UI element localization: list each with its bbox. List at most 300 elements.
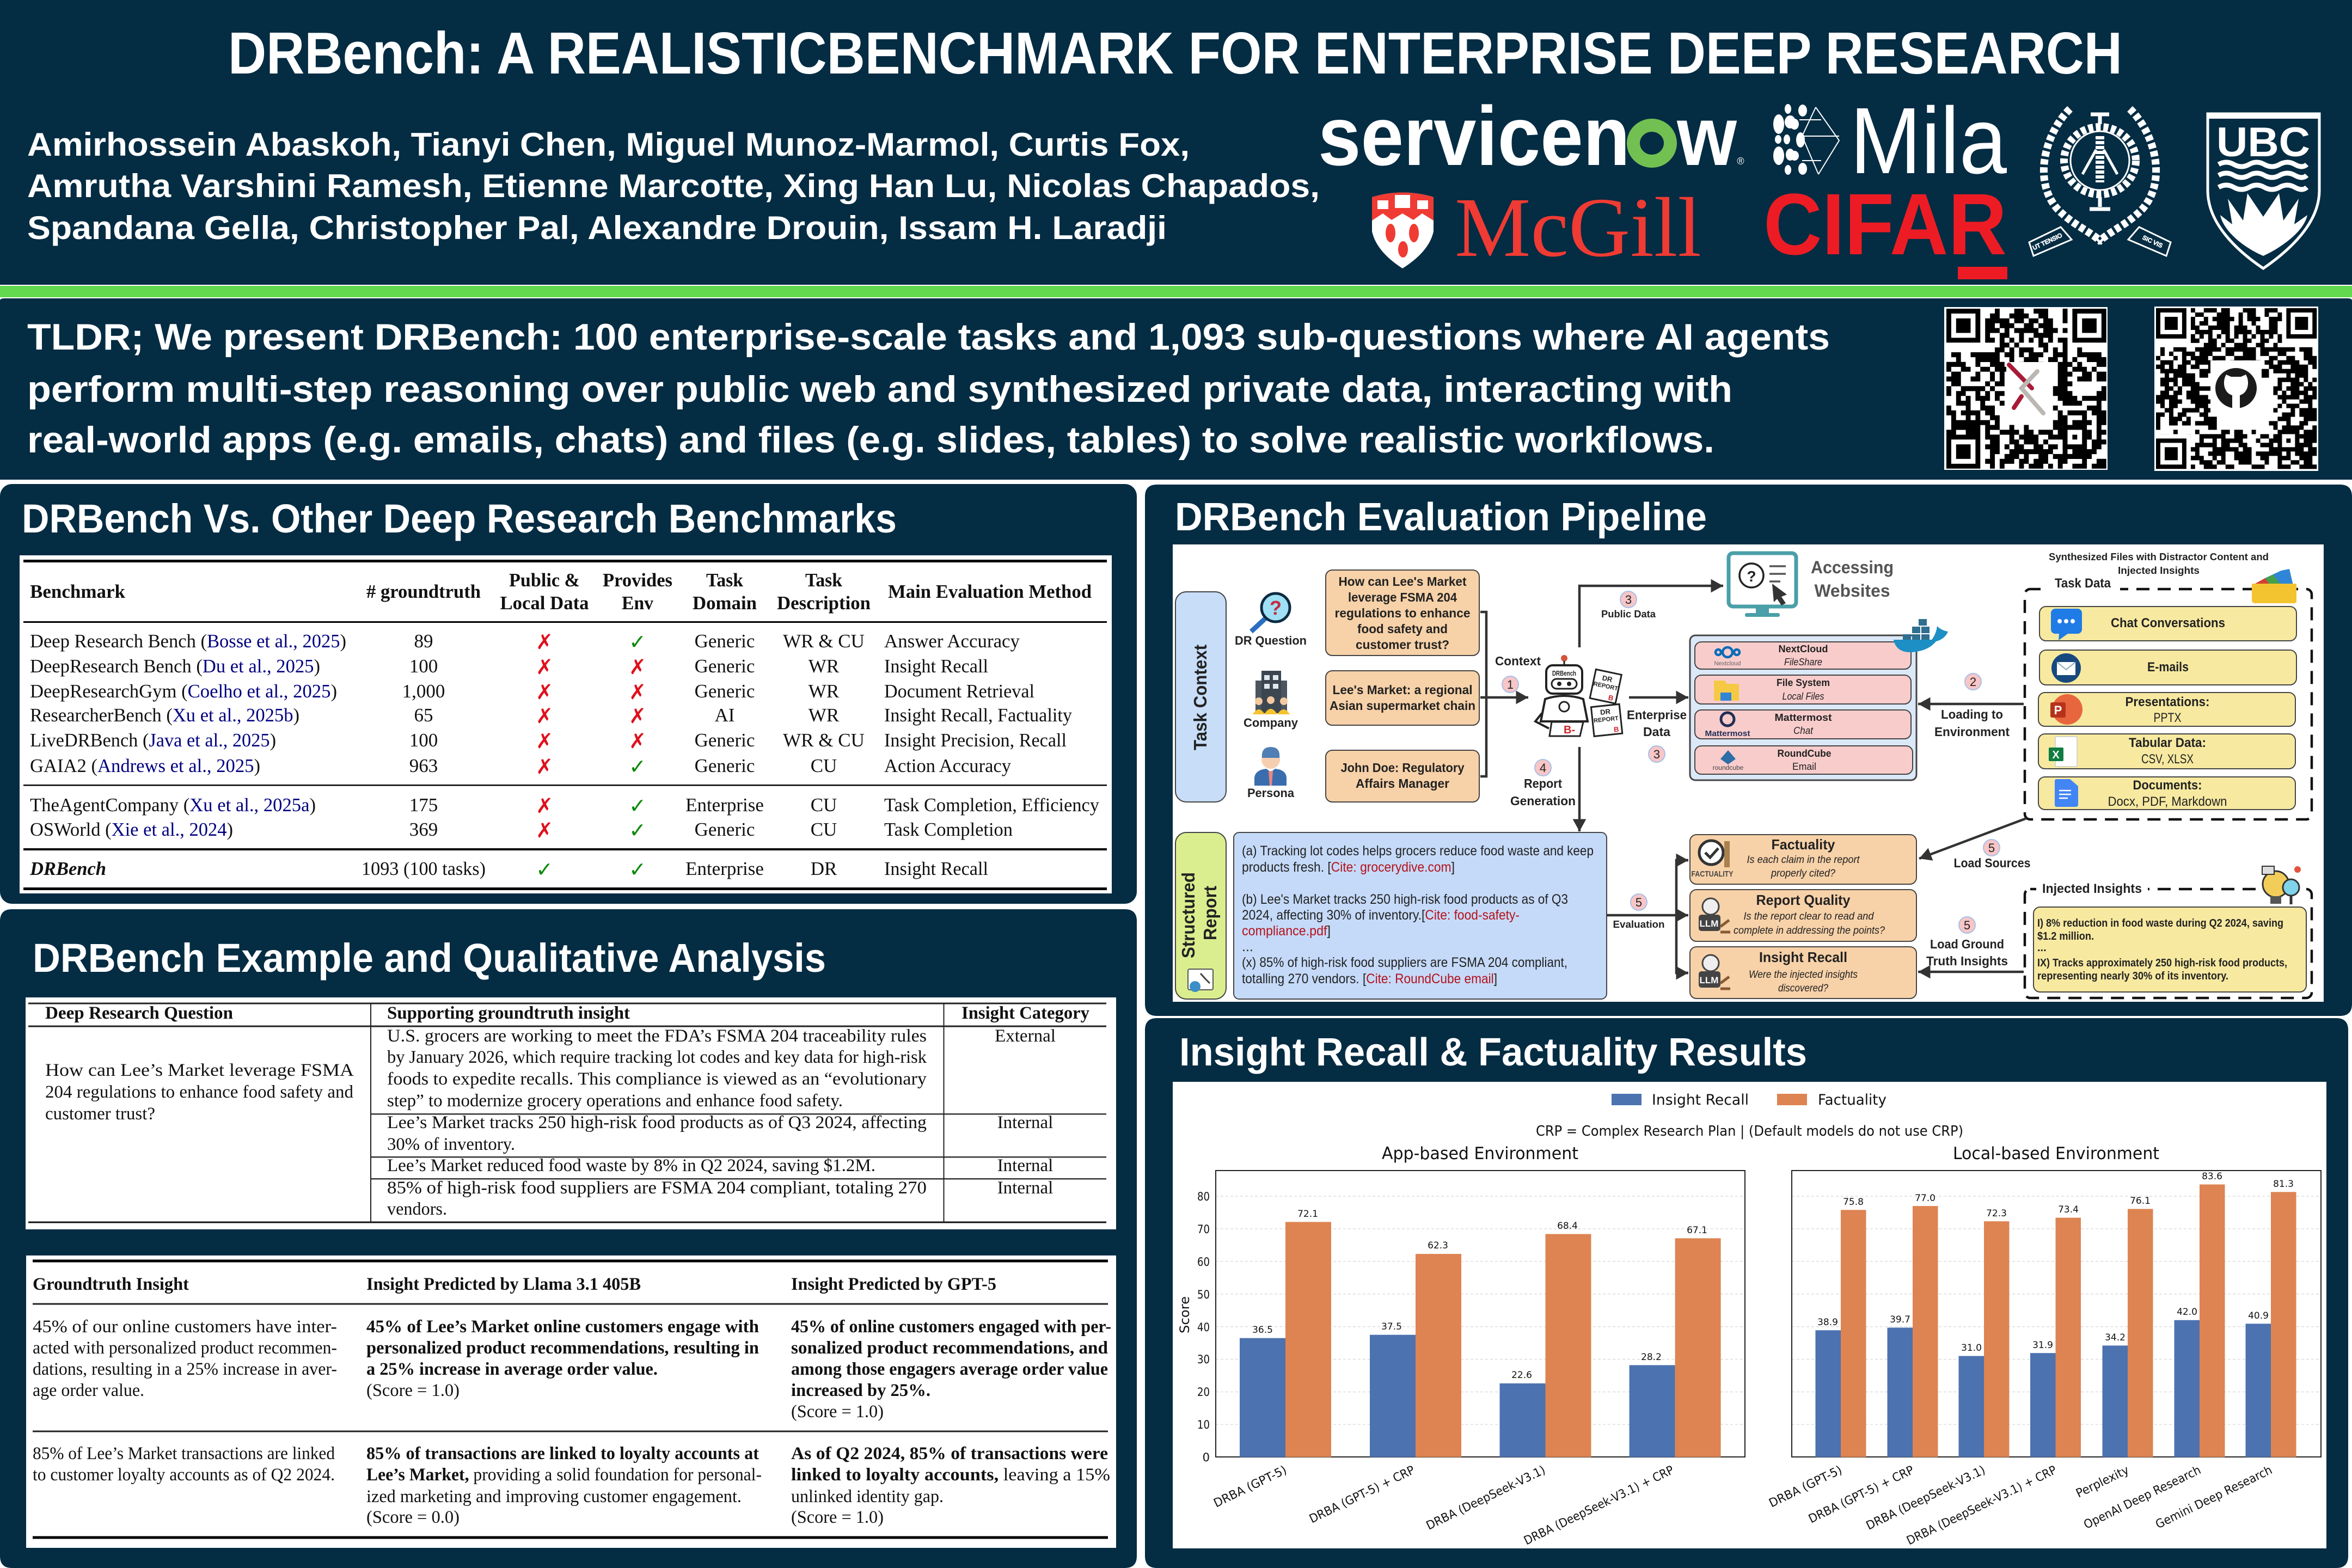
insight rows: 30% of inventory. <box>387 1135 515 1154</box>
row two: (Score = 1.0) <box>791 1508 884 1527</box>
table rows: Task Completion <box>884 819 1013 840</box>
y axis title: Score <box>1177 1296 1192 1333</box>
row one: among those engagers average order value <box>791 1359 1108 1379</box>
icon: folder <box>2252 569 2296 603</box>
task context band <box>1175 592 1226 802</box>
insights text: $1.2 million. <box>2037 930 2094 942</box>
evaluation box: report quality <box>1690 890 1916 941</box>
authors: Spandana Gella, Christopher Pal, Alexandre Drouin, Issam H. Laradji <box>27 210 1167 246</box>
row one: 45% of Lee’s Market online customers engage with <box>366 1317 759 1337</box>
context box: question <box>1326 570 1479 656</box>
value labels: 39.7 <box>1890 1314 1910 1325</box>
file row: presentations: Presentations: <box>2126 695 2209 709</box>
arrow: evaluation: 5 <box>1636 896 1642 909</box>
evaluation box: factuality: Is each claim in the report <box>1747 854 1860 866</box>
table rows: WR <box>808 656 840 677</box>
value labels: 36.5 <box>1252 1325 1273 1336</box>
table header: Insight Predicted by Llama 3.1 405B <box>366 1275 641 1294</box>
caption: synthesized files <box>2049 552 2269 576</box>
QR code: paper <box>1944 307 2108 470</box>
label: accessing websites: Websites <box>1814 581 1890 601</box>
heading: DRBench Evaluation Pipeline <box>1175 495 1707 539</box>
row one: a 25% increase in average order value. <box>366 1359 658 1379</box>
table rows: DeepResearch Bench (Du et al., 2025) <box>30 656 320 677</box>
x axis labels: DRBA (GPT-5) + CRP <box>1806 1463 1916 1526</box>
row two: unlinked identity gap. <box>791 1487 944 1506</box>
evaluation box: insight recall: LLM <box>1700 975 1718 985</box>
heading: Insight Recall & Factuality Results <box>1179 1031 1807 1074</box>
logo: McGill: McGill <box>1455 180 1701 274</box>
task context band: Task Context <box>1190 645 1210 750</box>
app: RoundCube: RoundCube <box>1777 748 1832 759</box>
icon: DRBench robot agent: B- <box>1564 724 1575 736</box>
file row: chat <box>2039 607 2296 641</box>
table header: Main Evaluation Method <box>888 581 1092 602</box>
table rows: 65 <box>414 705 433 726</box>
value labels: 42.0 <box>2177 1307 2197 1318</box>
insight rows: 85% of high-risk food suppliers are FSMA 204 compliant, totaling 270 <box>387 1178 927 1198</box>
insight rows: step” to modernize grocery operations and enhance food safety. <box>387 1091 843 1111</box>
table rows: Action Accuracy <box>884 755 1011 776</box>
table rows: 369 <box>409 819 438 840</box>
panel: example and qualitative analysis <box>0 909 1137 1568</box>
context box: company: Asian supermarket chain <box>1330 699 1475 713</box>
arrow: report generation: Report <box>1524 776 1562 791</box>
table rows: ✗ <box>536 681 553 704</box>
value labels: 75.8 <box>1843 1197 1864 1208</box>
table rows: ✗ <box>629 705 646 728</box>
legend: Insight Recall <box>1652 1092 1749 1108</box>
structured report band: Report <box>1200 886 1220 940</box>
logo: UBC <box>2207 114 2320 268</box>
value labels: 62.3 <box>1428 1240 1448 1251</box>
insights text <box>2033 907 2306 992</box>
table rows: CU <box>811 794 837 816</box>
evaluation box: report quality: complete in addressing the points? <box>1734 925 1885 936</box>
row one: increased by 25%. <box>791 1381 930 1400</box>
app: Mattermost: Chat <box>1793 725 1814 736</box>
table rows: Generic <box>695 730 755 751</box>
icon: DRBench robot agent <box>1535 655 1588 736</box>
y axis: 20 <box>1197 1386 1210 1399</box>
context box: persona: Affairs Manager <box>1356 776 1449 791</box>
x axis labels: OpenAI Deep Research <box>2082 1463 2203 1532</box>
table rows: WR <box>808 705 840 726</box>
table rows: 100 <box>409 730 438 751</box>
table rows: OSWorld (Xie et al., 2024) <box>30 819 233 840</box>
file row: emails: E-mails <box>2147 660 2189 675</box>
injected insights dashed group: Injected Insights <box>2042 881 2142 896</box>
arrow: load ground truth insights: Truth Insights <box>1926 954 2008 968</box>
structured report text: (x) 85% of high-risk food suppliers are FSMA 204 compliant, <box>1242 955 1567 970</box>
table rows: Insight Precision, Recall <box>884 730 1067 751</box>
icon: DR question magnifier: ? <box>1270 597 1282 619</box>
row two: linked to loyalty accounts, leaving a 15% <box>791 1465 1110 1485</box>
authors: Amirhossein Abaskoh, Tianyi Chen, Miguel Munoz-Marmol, Curtis Fox, <box>27 126 1190 163</box>
file row: presentations <box>2038 693 2295 726</box>
environment apps container <box>1690 635 1916 780</box>
insight rows: Internal <box>997 1113 1053 1132</box>
x axis labels: Gemini Deep Research <box>2153 1463 2275 1532</box>
y axis: 40 <box>1197 1321 1210 1334</box>
icon: DR reports: REPORT <box>1594 715 1619 724</box>
arrow: enterprise data: Data <box>1643 725 1670 739</box>
row one: age order value. <box>33 1381 144 1400</box>
insights text: I) 8% reduction in food waste during Q2 2024, saving <box>2037 917 2283 929</box>
row two: Lee’s Market, providing a solid foundation for personal- <box>366 1465 762 1485</box>
table header: Local Data <box>500 592 589 614</box>
table header <box>33 1275 996 1294</box>
arrow: public data: 3 <box>1625 593 1632 607</box>
chart: local-based environment <box>1767 1144 2321 1548</box>
context box: question: leverage FSMA 204 <box>1348 590 1457 604</box>
arrow: load sources: 5 <box>1988 841 1995 855</box>
table rows: ✓ <box>629 631 646 654</box>
table rows: Enterprise <box>685 794 764 816</box>
logo: CIFAR: CIFAR <box>1763 175 2007 273</box>
context box: question: food safety and <box>1357 622 1448 636</box>
value labels: 22.6 <box>1511 1370 1532 1381</box>
TLDR text: perform multi-step reasoning over public web and synthesized private data, interacting with <box>27 369 1732 410</box>
context box: company: Lee's Market: a regional <box>1333 683 1472 697</box>
title: DRBench: A REALISTICBENCHMARK FOR ENTERPRISE DEEP RESEARCH <box>228 20 2122 87</box>
arrow: load ground truth insights: 5 <box>1964 918 1970 932</box>
app: RoundCube <box>1695 746 1913 774</box>
panel: header <box>0 0 2352 285</box>
file row: tabular <box>2038 734 2295 769</box>
file row: documents <box>2038 777 2295 810</box>
table rows: Generic <box>695 656 755 677</box>
arrow: report generation <box>1510 747 1579 831</box>
file row: documents: Documents: <box>2133 778 2202 793</box>
app: NextCloud <box>1695 642 1911 669</box>
y axis: 10 <box>1197 1418 1210 1431</box>
insights text: ... <box>2037 942 2047 954</box>
table header: Supporting groundtruth insight <box>387 1003 630 1023</box>
context box: question: How can Lee's Market <box>1338 574 1467 589</box>
structured report text: totalling 270 vendors. [Cite: RoundCube email] <box>1242 971 1497 987</box>
chart title: Local-based Environment <box>1953 1144 2159 1163</box>
y axis <box>1197 1190 1210 1464</box>
evaluation box: factuality: Factuality <box>1772 836 1835 853</box>
legend: Factuality <box>1818 1092 1886 1108</box>
logo: Mila: Mila <box>1850 88 2007 193</box>
icon: DR reports: DR <box>1601 673 1614 684</box>
pipeline diagram <box>1173 544 2324 1002</box>
table rows: WR <box>808 681 840 702</box>
context box: persona <box>1326 750 1479 802</box>
table rows: CU <box>811 819 837 840</box>
structured report text <box>1234 832 1607 999</box>
app: file system: Local Files <box>1783 691 1824 702</box>
evaluation box: insight recall: Were the injected insights <box>1749 969 1858 981</box>
arrow: context to agent <box>1480 612 1541 776</box>
TLDR text: real-world apps (e.g. emails, chats) and files (e.g. slides, tables) to solve realistic workflows. <box>27 419 1714 461</box>
table header: Deep Research Question <box>45 1003 233 1023</box>
arrow: loading to environment <box>1918 673 2024 739</box>
table rows: WR & CU <box>783 730 865 751</box>
insights text: IX) Tracks approximately 250 high-risk food products, <box>2037 957 2287 969</box>
value labels <box>1252 1209 1707 1381</box>
logo: engineering seal: SIC VIS <box>2141 235 2164 249</box>
structured report text: products fresh. [Cite: grocerydive.com] <box>1242 860 1455 875</box>
table rows: 100 <box>409 656 438 677</box>
insights text: representing nearly 30% of its inventory. <box>2037 970 2228 982</box>
value labels: 83.6 <box>2202 1171 2222 1182</box>
table header <box>30 569 1092 614</box>
table rows: ✗ <box>536 631 553 654</box>
context box: question: customer trust? <box>1356 638 1449 652</box>
chart area <box>1173 1082 2326 1548</box>
label: accessing websites <box>1811 558 1894 601</box>
QR code: GitHub <box>2154 307 2318 471</box>
context box: persona: John Doe: Regulatory <box>1340 761 1465 775</box>
question text: customer trust? <box>45 1104 155 1124</box>
table rows: LiveDRBench (Java et al., 2025) <box>30 730 276 751</box>
icon: DR reports: REPORT <box>1593 681 1619 693</box>
row two: ized marketing and improving customer engagement. <box>366 1487 742 1506</box>
task data dashed group <box>2025 569 2312 819</box>
arrow: public data <box>1579 586 1723 647</box>
context box: company <box>1326 671 1479 725</box>
panel: DRBench vs other benchmarks <box>0 484 1137 904</box>
heading: DRBench Example and Qualitative Analysis <box>33 935 826 981</box>
app: file system: File System <box>1777 677 1830 688</box>
y axis: 70 <box>1197 1223 1210 1236</box>
predicted insights table <box>26 1255 1116 1548</box>
row two: (Score = 0.0) <box>366 1508 460 1527</box>
file row: documents: Docx, PDF, Markdown <box>2108 794 2227 809</box>
chart note: CRP = Complex Research Plan | (Default models do not use CRP) <box>1536 1123 1963 1140</box>
row two: 85% of transactions are linked to loyalty accounts at <box>366 1444 759 1463</box>
table rows: ✗ <box>536 756 553 779</box>
table rows: GAIA2 (Andrews et al., 2025) <box>30 755 260 776</box>
file row: chat: Chat Conversations <box>2111 616 2225 630</box>
x axis labels: DRBA (GPT-5) + CRP <box>1307 1463 1417 1526</box>
evaluation box: factuality: FACTUALITY <box>1691 869 1734 879</box>
app: file system <box>1695 675 1911 704</box>
table header: Description <box>777 592 871 614</box>
table rows: ✗ <box>536 819 553 842</box>
value labels: 31.9 <box>2032 1340 2053 1351</box>
arrow: enterprise data <box>1627 697 1688 762</box>
file row: tabular: Tabular Data: <box>2129 736 2206 750</box>
logo: servicenow: servicenow <box>1318 89 1737 183</box>
structured report band <box>1175 832 1226 999</box>
file row: tabular: CSV, XLSX <box>2141 752 2194 767</box>
table rows: Insight Recall <box>884 858 988 879</box>
row two: As of Q2 2024, 85% of transactions were <box>791 1444 1108 1463</box>
value labels: 38.9 <box>1817 1317 1838 1328</box>
insight rows: vendors. <box>387 1199 447 1219</box>
logo: engineering seal <box>2029 109 2171 256</box>
row one: (Score = 1.0) <box>366 1381 460 1400</box>
structured report text: compliance.pdf] <box>1242 923 1331 939</box>
table rows: ✓ <box>536 859 553 881</box>
table header: Benchmark <box>30 581 126 602</box>
table rows: 1093 (100 tasks) <box>362 858 486 879</box>
structured report text: (b) Lee's Market tracks 250 high-risk food products as of Q3 <box>1242 892 1568 907</box>
arrow: report generation: Generation <box>1510 794 1576 808</box>
value labels: 31.0 <box>1961 1343 1982 1353</box>
table header: Task <box>706 569 744 591</box>
table rows <box>29 630 1099 881</box>
context box: question: regulations to enhance <box>1335 606 1470 620</box>
structured report text: 2024, affecting 30% of inventory.[Cite: food-safety- <box>1242 908 1520 923</box>
table rows: ✓ <box>629 819 646 842</box>
table header: Provides <box>603 569 672 591</box>
table header: # groundtruth <box>366 581 481 602</box>
legend <box>1612 1092 1886 1108</box>
table rows: ✗ <box>536 730 553 753</box>
insight rows: Internal <box>997 1156 1053 1175</box>
value labels: 68.4 <box>1557 1221 1578 1232</box>
row two <box>33 1444 1110 1527</box>
table rows: ✓ <box>629 859 646 881</box>
table rows: Insight Recall <box>884 656 988 677</box>
y axis: 30 <box>1197 1353 1210 1366</box>
table rows: Enterprise <box>685 858 764 879</box>
arrow: loading to environment: Environment <box>1934 725 2010 739</box>
table rows: Answer Accuracy <box>884 630 1020 652</box>
row one: sonalized product recommendations, and <box>791 1338 1108 1358</box>
arrow: load ground truth insights <box>1918 917 2024 972</box>
table rows: Generic <box>695 755 755 776</box>
logo: engineering seal: UT TENSIO <box>2032 232 2063 252</box>
file row: presentations: PPTX <box>2154 710 2181 725</box>
panel: evaluation pipeline <box>1145 485 2352 1016</box>
arrow: enterprise data: Enterprise <box>1627 708 1687 722</box>
table rows: ✗ <box>536 656 553 679</box>
table rows: ✗ <box>536 795 553 818</box>
icon: DR reports: B <box>1608 693 1614 702</box>
question text <box>45 1061 354 1124</box>
table rows: ✗ <box>629 656 646 679</box>
value labels: 37.5 <box>1381 1321 1402 1332</box>
logo: servicenow: ® <box>1737 156 1744 167</box>
value labels: 76.1 <box>2130 1196 2151 1206</box>
label: accessing websites: Accessing <box>1811 558 1894 577</box>
app: Mattermost: Mattermost <box>1775 712 1832 723</box>
evaluation box: factuality: properly cited? <box>1771 868 1835 879</box>
x axis labels <box>1767 1463 2275 1548</box>
logo: Mila <box>1773 88 2007 193</box>
logo: UBC: UBC <box>2216 119 2310 166</box>
table rows: DR <box>811 858 837 879</box>
table rows: DRBench <box>29 858 106 879</box>
icon: company building: Company <box>1244 716 1298 730</box>
row one: 45% of online customers engaged with per- <box>791 1317 1111 1337</box>
x axis labels: DRBA (DeepSeek-V3.1) <box>1424 1463 1548 1533</box>
icon: persona: Persona <box>1247 786 1295 800</box>
x axis labels: DRBA (DeepSeek-V3.1) + CRP <box>1904 1463 2059 1548</box>
evaluation box: insight recall: discovered? <box>1778 983 1828 994</box>
table rows: CU <box>811 755 837 776</box>
value labels: 72.1 <box>1297 1209 1318 1220</box>
example question table <box>26 997 1116 1229</box>
insight rows: foods to expedite recalls. This compliance is viewed as an “evolutionary <box>387 1069 927 1089</box>
table rows: Generic <box>695 630 755 652</box>
file row: emails <box>2039 650 2296 685</box>
table rows: Generic <box>695 819 755 840</box>
table header: Groundtruth Insight <box>33 1275 189 1294</box>
row one <box>33 1317 1111 1422</box>
y axis: 50 <box>1197 1288 1210 1301</box>
icon: DRBench robot agent: DRBench <box>1552 669 1576 677</box>
app: NextCloud: NextCloud <box>1778 644 1828 654</box>
structured report band: Structured <box>1178 872 1198 958</box>
value labels: 28.2 <box>1641 1352 1662 1363</box>
arrow: loading to environment: Loading to <box>1941 707 2003 721</box>
green divider band <box>0 286 2352 297</box>
app: RoundCube: roundcube <box>1713 764 1744 771</box>
table rows: ✓ <box>629 756 646 779</box>
table rows: TheAgentCompany (Xu et al., 2025a) <box>30 794 316 816</box>
x axis labels: DRBA (GPT-5) <box>1211 1463 1289 1510</box>
table header: Env <box>622 592 653 614</box>
table rows: ✗ <box>629 681 646 704</box>
icon: monitor accessing websites <box>1729 553 1796 617</box>
insight rows: Lee’s Market reduced food waste by 8% in Q2 2024, saving $1.2M. <box>387 1156 875 1175</box>
table rows: Document Retrieval <box>884 681 1034 702</box>
value labels <box>1817 1171 2294 1353</box>
x axis labels <box>1211 1463 1676 1548</box>
arrow: context to agent: 1 <box>1507 678 1514 691</box>
table rows: Deep Research Bench (Bosse et al., 2025) <box>30 630 346 652</box>
injected insights dashed group <box>2025 866 2312 998</box>
arrow: evaluation <box>1607 860 1688 973</box>
app: NextCloud: Nextcloud <box>1714 660 1741 667</box>
icon: company building <box>1244 671 1298 730</box>
task data dashed group: Task Data <box>2055 576 2111 591</box>
heading: DRBench Vs. Other Deep Research Benchmarks <box>22 496 897 541</box>
row one: personalized product recommendations, resulting in <box>366 1338 759 1358</box>
table rows: 963 <box>409 755 438 776</box>
row two: to customer loyalty accounts as of Q2 2024. <box>33 1465 335 1485</box>
icon: DR question magnifier <box>1235 593 1307 647</box>
panel: TLDR <box>0 298 2352 480</box>
x axis labels: DRBA (GPT-5) <box>1767 1463 1845 1510</box>
arrow: evaluation: Evaluation <box>1613 919 1665 930</box>
table rows: Generic <box>695 681 755 702</box>
app: Mattermost <box>1695 710 1911 739</box>
evaluation box: report quality: Is the report clear to read and <box>1743 911 1875 922</box>
row one: 45% of our online customers have inter- <box>33 1317 337 1337</box>
table rows: ✗ <box>629 730 646 753</box>
value labels: 81.3 <box>2273 1179 2294 1190</box>
table rows: 89 <box>414 630 433 652</box>
icon: persona <box>1247 747 1295 800</box>
row one: dations, resulting in a 25% increase in aver- <box>33 1359 337 1379</box>
value labels: 73.4 <box>2058 1204 2079 1215</box>
app: Mattermost: Mattermost <box>1705 729 1750 738</box>
table header: Domain <box>693 592 757 614</box>
evaluation box: report quality: LLM <box>1700 918 1718 929</box>
value labels: 72.3 <box>1986 1208 2007 1219</box>
question text: How can Lee’s Market leverage FSMA <box>45 1061 354 1080</box>
evaluation box: factuality <box>1690 835 1916 884</box>
row one: acted with personalized product recommen- <box>33 1338 337 1358</box>
authors <box>27 126 1320 246</box>
arrow: context to agent: Context <box>1495 654 1541 668</box>
icon: monitor accessing websites: ? <box>1747 568 1756 585</box>
app: RoundCube: Email <box>1792 761 1816 772</box>
y axis: 0 <box>1203 1451 1210 1464</box>
table rows: Insight Recall, Factuality <box>884 705 1072 726</box>
arrow: loading to environment: 2 <box>1970 675 1976 689</box>
arrow: public data: Public Data <box>1601 609 1656 620</box>
table rows: 1,000 <box>402 681 445 702</box>
